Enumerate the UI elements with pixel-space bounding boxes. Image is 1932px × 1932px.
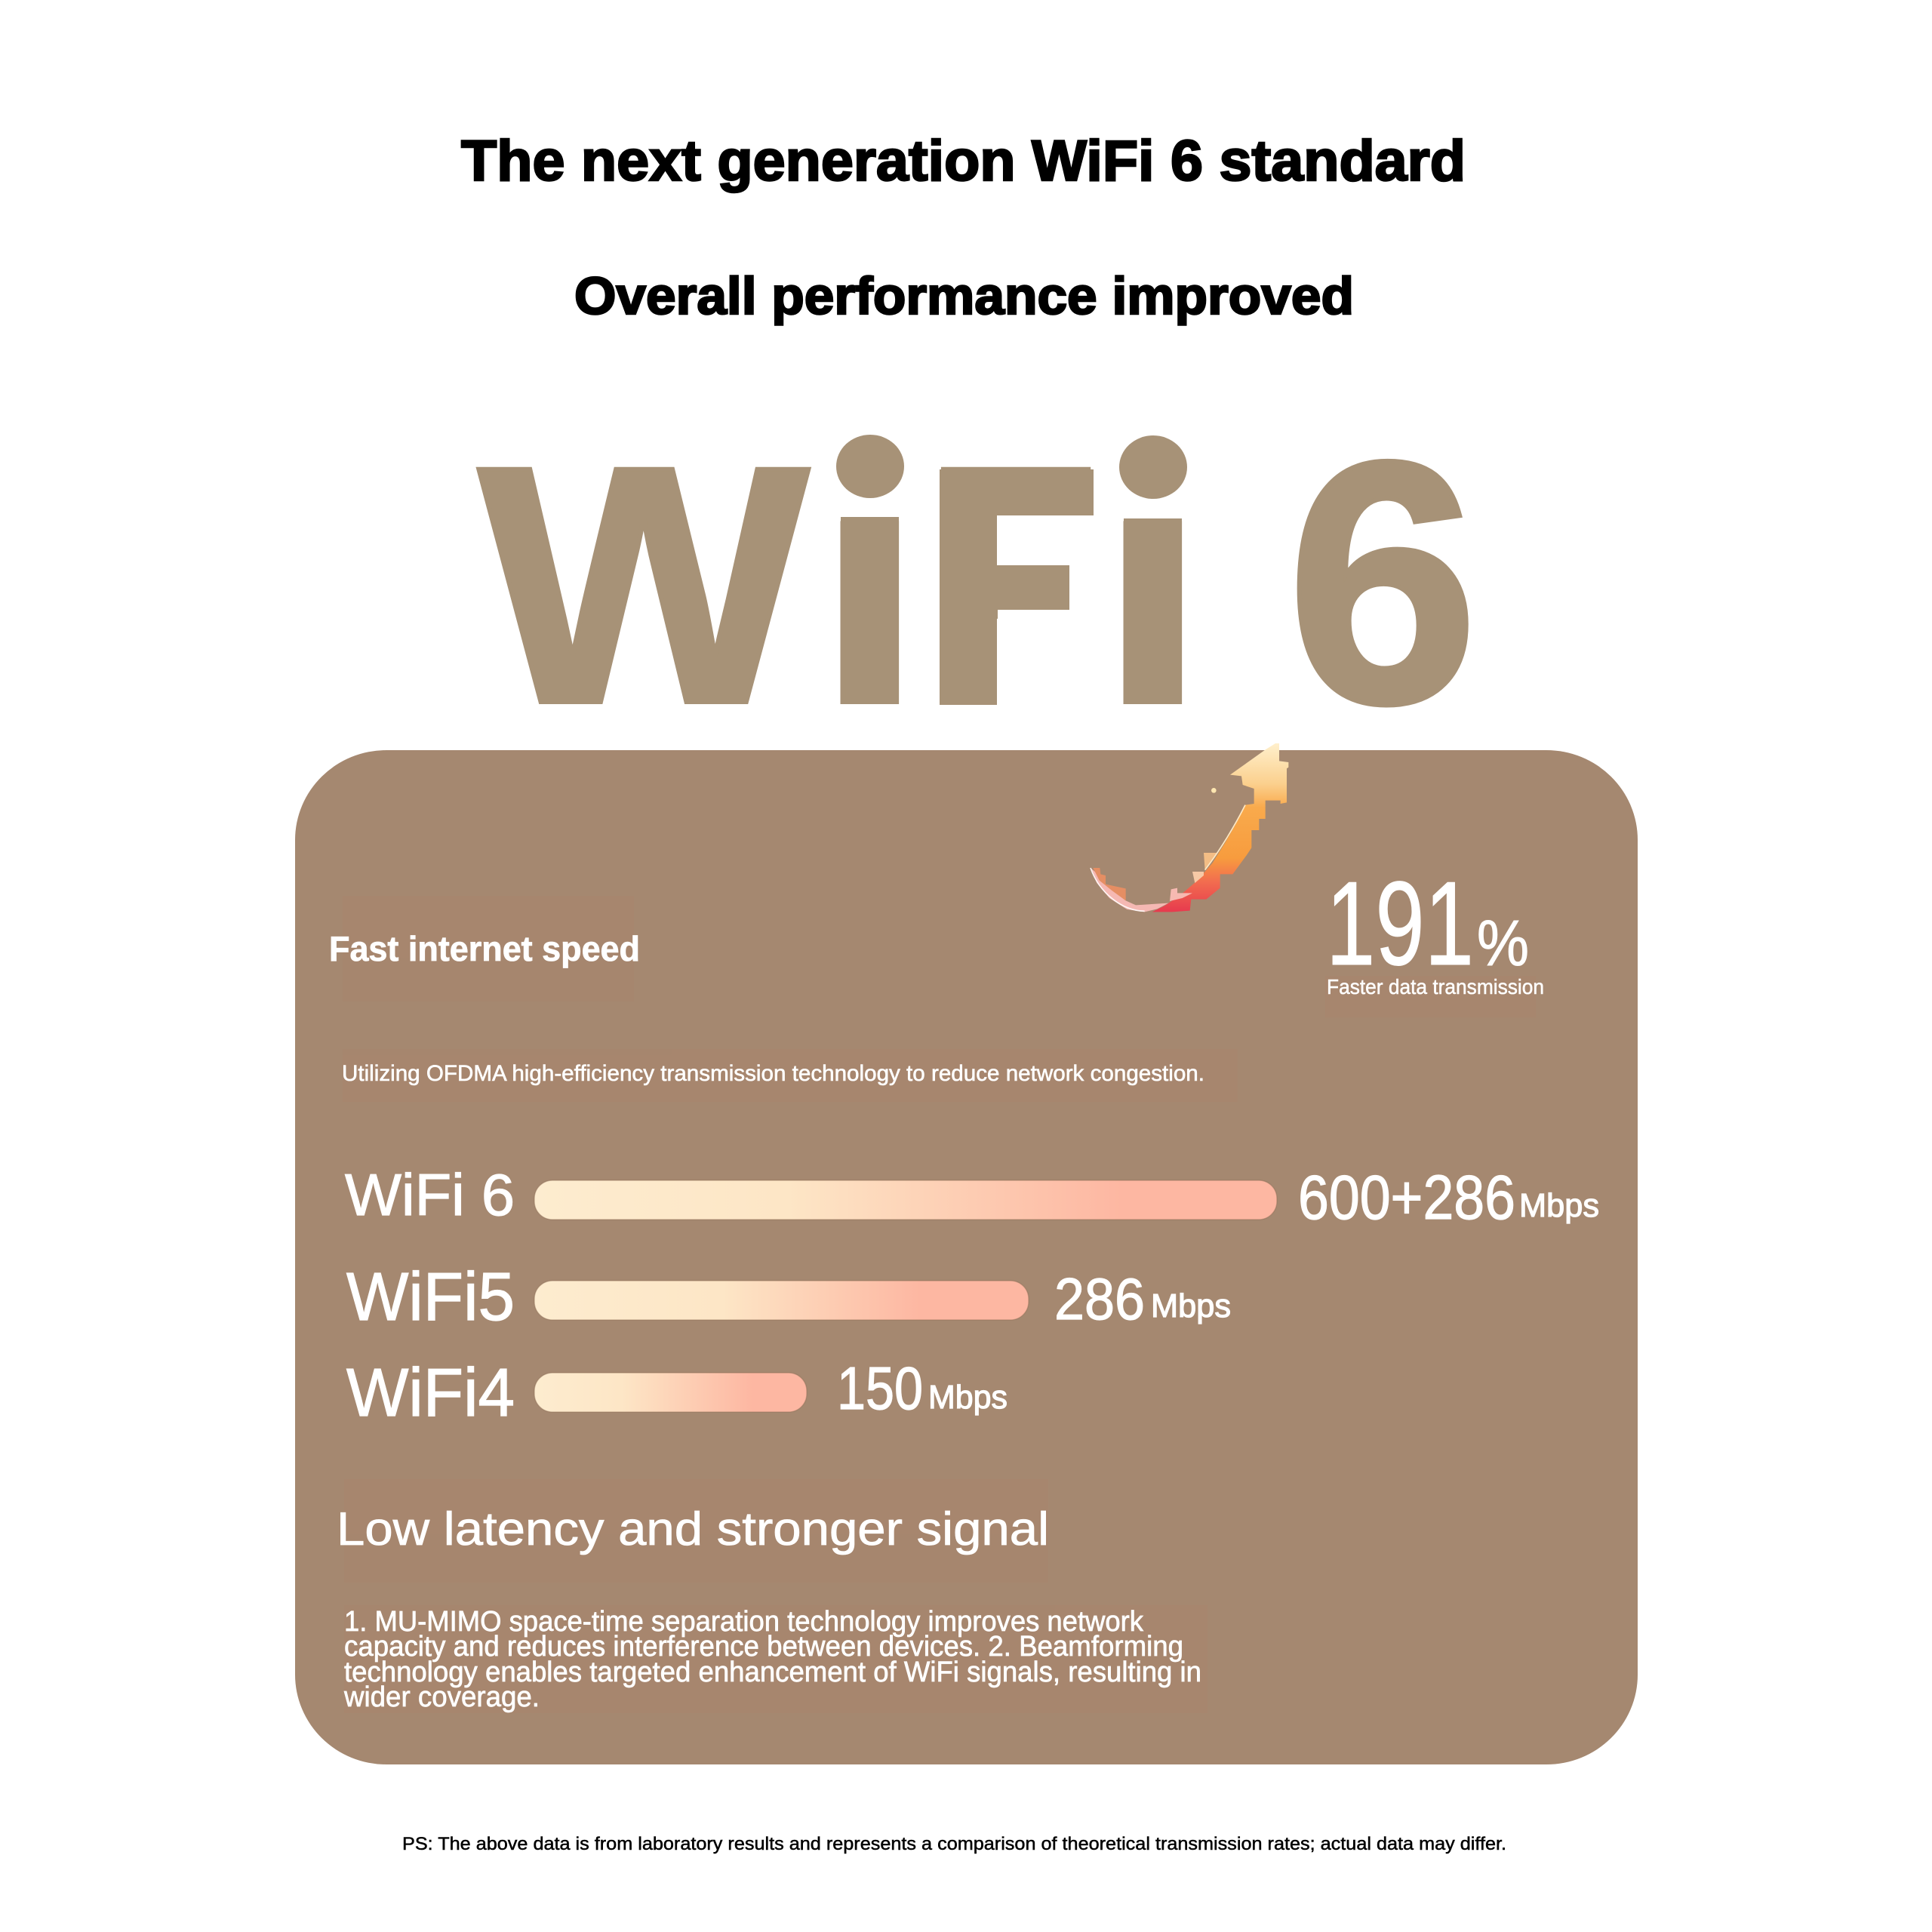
large WiFi 6 heading	[0, 0, 1932, 755]
row: WiFi 6: 600+286	[1298, 1162, 1515, 1232]
row: WiFi5	[346, 1260, 1231, 1335]
heading: fast internet speed: Fast internet speed	[329, 929, 640, 968]
icon: rising arrow	[1091, 743, 1288, 912]
row: WiFi 6: WiFi 6	[345, 1161, 515, 1228]
row: WiFi4: WiFi4	[346, 1355, 515, 1431]
description: MU-MIMO and beamforming: wider coverage.	[343, 1681, 540, 1713]
row: WiFi4: Mbps	[928, 1379, 1008, 1416]
description: MU-MIMO and beamforming: technology enables targeted enhancement of WiFi signals, resulting in	[344, 1657, 1201, 1688]
bar chart: speed comparison	[345, 1161, 1599, 1431]
stat: 191 percent: %	[1477, 908, 1529, 980]
row: WiFi4	[346, 1355, 1008, 1431]
title: The next generation WiFi 6 standard	[461, 129, 1466, 193]
subtitle: Overall performance improved	[574, 266, 1354, 325]
panel: performance card	[295, 743, 1638, 1764]
row: WiFi5: 286	[1054, 1266, 1145, 1332]
description: OFDMA: Utilizing OFDMA high-efficiency transmission technology to reduce network congestion.	[342, 1061, 1204, 1086]
heading: low latency: Low latency and stronger signal	[337, 1503, 1049, 1555]
stat: 191 percent: 191	[1326, 857, 1474, 990]
stat caption: Faster data transmission	[1327, 975, 1544, 998]
description: MU-MIMO and beamforming: 1. MU-MIMO space-time separation technology improves network	[344, 1606, 1144, 1638]
row: WiFi5: WiFi5	[346, 1260, 515, 1335]
description: MU-MIMO and beamforming	[343, 1606, 1201, 1713]
description: MU-MIMO and beamforming: capacity and reduces interference between devices. 2. Beamforming	[344, 1631, 1183, 1663]
row: WiFi 6: Mbps	[1519, 1187, 1599, 1224]
row: WiFi 6	[345, 1161, 1599, 1232]
row: WiFi5: Mbps	[1151, 1287, 1231, 1324]
footnote: PS: The above data is from laboratory results and represents a comparison of theoretical transmission rates; actual data may differ.	[402, 1834, 1506, 1854]
row: WiFi4: 150	[837, 1355, 923, 1422]
